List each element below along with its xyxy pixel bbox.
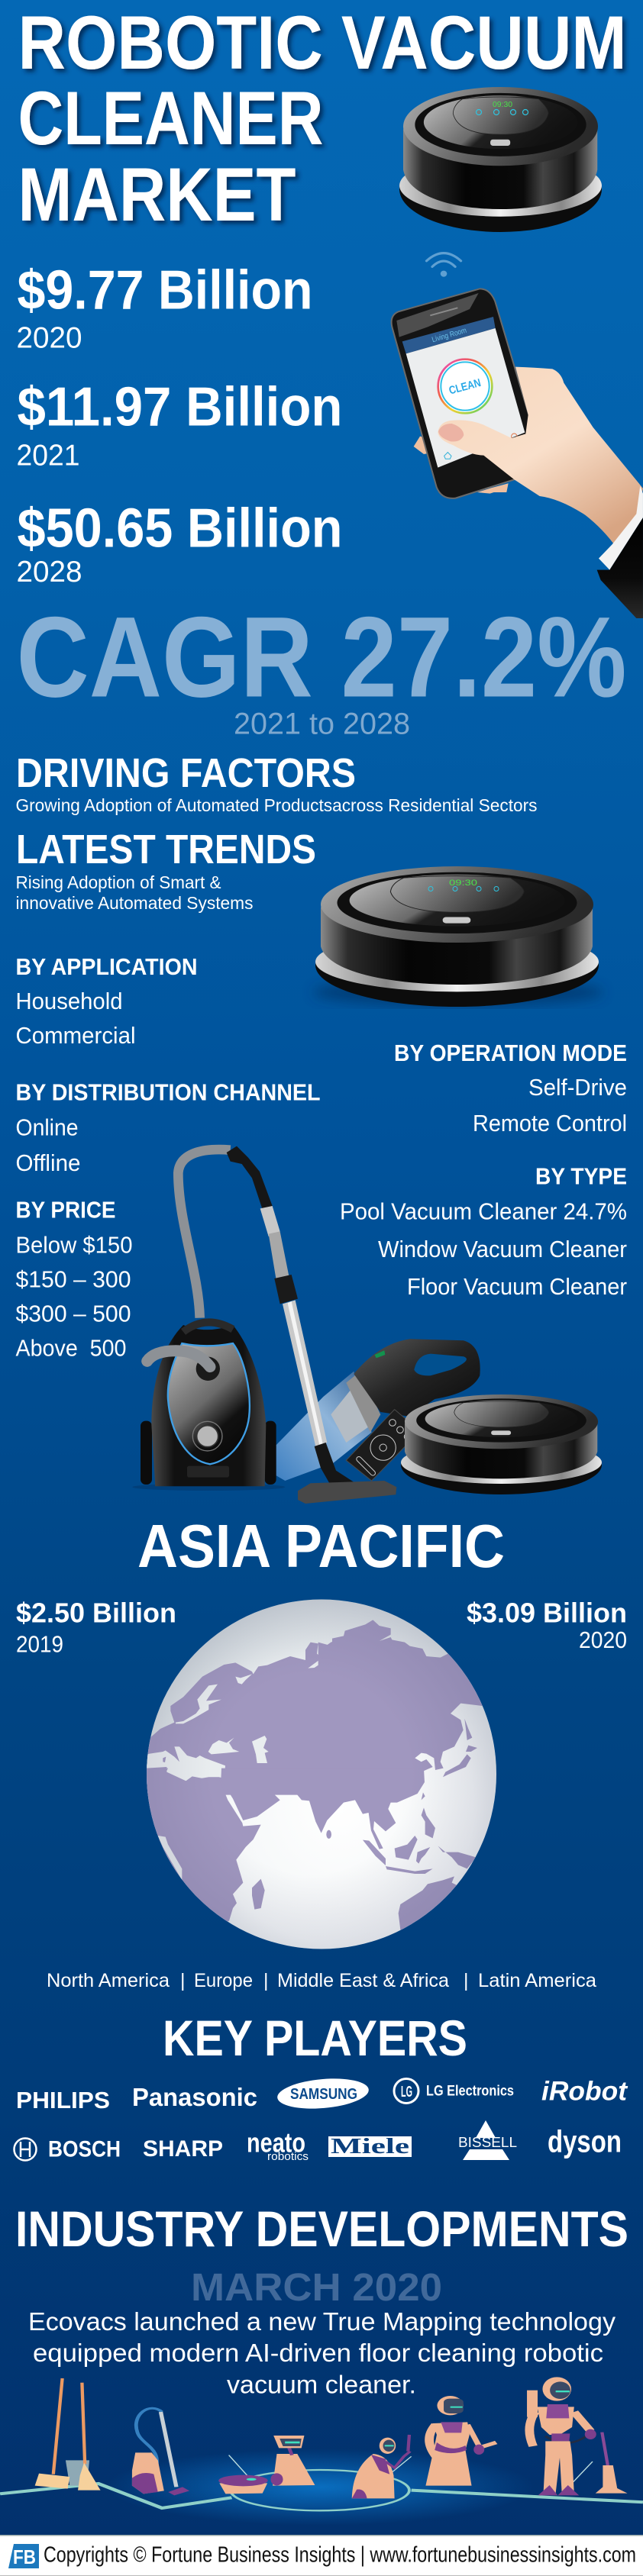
map: southern hemisphere land [143,1768,476,1933]
by operation mode: Remote Control [473,1110,627,1136]
stat: 2021 market size: 2021 [17,440,79,472]
logo: Philips: PHILIPS [16,2087,110,2113]
by distribution channel [15,1079,321,1176]
logo: Miele: Miele [331,2135,409,2158]
logo: Neato Robotics: robotics [267,2150,309,2163]
icon: broom and mop [35,2378,101,2491]
icon: wifi [426,253,461,277]
map: northern Eurasia east [318,1620,483,1777]
icon: cartoon vacuum [132,2408,189,2495]
logo: Bissell: BISSELL [458,2135,517,2150]
by application [15,953,197,1049]
icon: canister vacuum [141,1146,396,1504]
logo: Samsung [276,2075,370,2112]
CAGR period: 2021 to 2028 [234,707,410,740]
logo: LG Electronics: LG Electronics [426,2084,514,2099]
by distribution channel: Online [15,1114,78,1140]
regions list: | [180,1970,185,1991]
logo: Sharp: SHARP [143,2136,223,2162]
by operation mode [394,1040,627,1136]
Asia Pacific heading: ASIA PACIFIC [137,1512,505,1580]
logo: Miele [328,2135,412,2158]
title: MARKET [18,152,296,237]
icon: handheld vacuum [276,1339,480,1481]
stat: 2028 market size: $50.65 Billion [17,498,342,559]
icon: hand holding phone [392,289,643,618]
title: CLEANER [18,76,324,160]
icon: wheeled robot [270,2436,315,2486]
latest trends [15,827,316,913]
stat: 2021 market size: $11.97 Billion [17,377,342,438]
regions list: | [464,1970,469,1991]
footer bar [0,2535,643,2576]
logo: Bosch [14,2137,121,2162]
key players heading: KEY PLAYERS [163,2010,467,2066]
icon: remote control [346,1410,420,1481]
title [18,0,626,237]
regional stat: 2019 [16,1597,176,1658]
icon: hand holding phone: CLEAN [448,377,483,398]
regions list: Europe [194,1970,253,1991]
driving factors: DRIVING FACTORS [16,750,356,796]
latest trends: innovative Automated Systems [15,893,254,913]
logo: Bissell [458,2120,517,2160]
by application: BY APPLICATION [15,953,197,980]
illustration: cleaning tools and robots [0,2377,643,2525]
regions list: | [263,1970,269,1991]
by type [340,1163,627,1300]
logo: Bosch: BOSCH [48,2137,121,2162]
development description: vacuum cleaner. [227,2371,416,2398]
driving factors: Growing Adoption of Automated Productsacross Residential Sectors [15,795,538,815]
regions list: Middle East & Africa [277,1970,449,1991]
by type: Pool Vacuum Cleaner 24.7% [340,1198,627,1224]
by price: $150 – 300 [15,1265,131,1293]
icon: standing robot [425,2396,496,2486]
logo: Neato Robotics: neato [247,2126,305,2158]
regions list: Latin America [478,1970,596,1991]
logo: Fortune Business Insights: FB [13,2545,36,2568]
logo: iRobot: iRobot [541,2076,628,2107]
logo: LG Electronics: LG [401,2084,412,2100]
floor line [0,2455,643,2510]
by operation mode: BY OPERATION MODE [394,1040,627,1066]
logo: Dyson: dyson [548,2123,622,2158]
icon: robot vacuum bottom [401,1394,602,1494]
by type: BY TYPE [535,1163,627,1189]
by application: Household [15,988,122,1014]
icon: tall robot with vacuum [527,2377,628,2495]
by operation mode: Self-Drive [528,1074,627,1101]
development description: equipped modern AI-driven floor cleaning robotic [33,2339,603,2367]
by price: $300 – 500 [15,1301,131,1327]
regions list [47,1970,596,1991]
by price: Below $150 [15,1232,133,1258]
map: northern Eurasia west [143,1639,341,1795]
latest trends: LATEST TRENDS [16,827,316,872]
logo: Panasonic: Panasonic [132,2083,257,2111]
icon: robot vacuum top: 09:30 [493,101,512,109]
by distribution channel: Offline [15,1149,81,1176]
logo: LG Electronics [394,2079,514,2104]
regional stat: 2020: 2020 [579,1627,627,1653]
stat: 2020 market size [17,260,313,354]
regional stat: 2019: $2.50 Billion [16,1597,176,1629]
by price [15,1197,133,1362]
icon: robot vacuum middle [313,866,603,1007]
by distribution channel: BY DISTRIBUTION CHANNEL [15,1079,321,1105]
by price: BY PRICE [15,1197,116,1223]
stat: 2021 market size [17,377,342,472]
regions list: North America [47,1970,170,1991]
icon: robot vacuum middle: 09:30 [449,879,477,888]
stat: 2020 market size: $9.77 Billion [17,260,313,321]
key players logos [14,2075,628,2163]
regional stat: 2019: 2019 [16,1630,63,1658]
icon: robot vacuum top [399,87,602,232]
regional stat: 2020 [467,1597,627,1653]
development date: MARCH 2020 [191,2265,442,2309]
logo: Samsung: SAMSUNG [290,2086,357,2103]
development description: Ecovacs launched a new True Mapping technology [28,2307,616,2336]
stat: 2020 market size: 2020 [17,322,82,354]
regional stat: 2020: $3.09 Billion [467,1597,627,1629]
by type: Floor Vacuum Cleaner [407,1273,627,1300]
icon: vacuum cleaner group [132,1146,602,1504]
globe map [143,1600,499,1949]
by application: Commercial [15,1022,136,1049]
stat: 2028 market size: 2028 [17,556,82,588]
latest trends: Rising Adoption of Smart & [15,872,221,892]
by price: Above 500 [15,1334,127,1362]
icon: cartoon robot vacuum [218,2475,268,2494]
driving factors [15,750,538,815]
by type: Window Vacuum Cleaner [378,1236,627,1262]
icon: small robot [352,2435,410,2498]
development description [28,2307,616,2398]
stat: 2028 market size [17,498,342,588]
icon: hand holding phone: Living Room [431,327,467,344]
